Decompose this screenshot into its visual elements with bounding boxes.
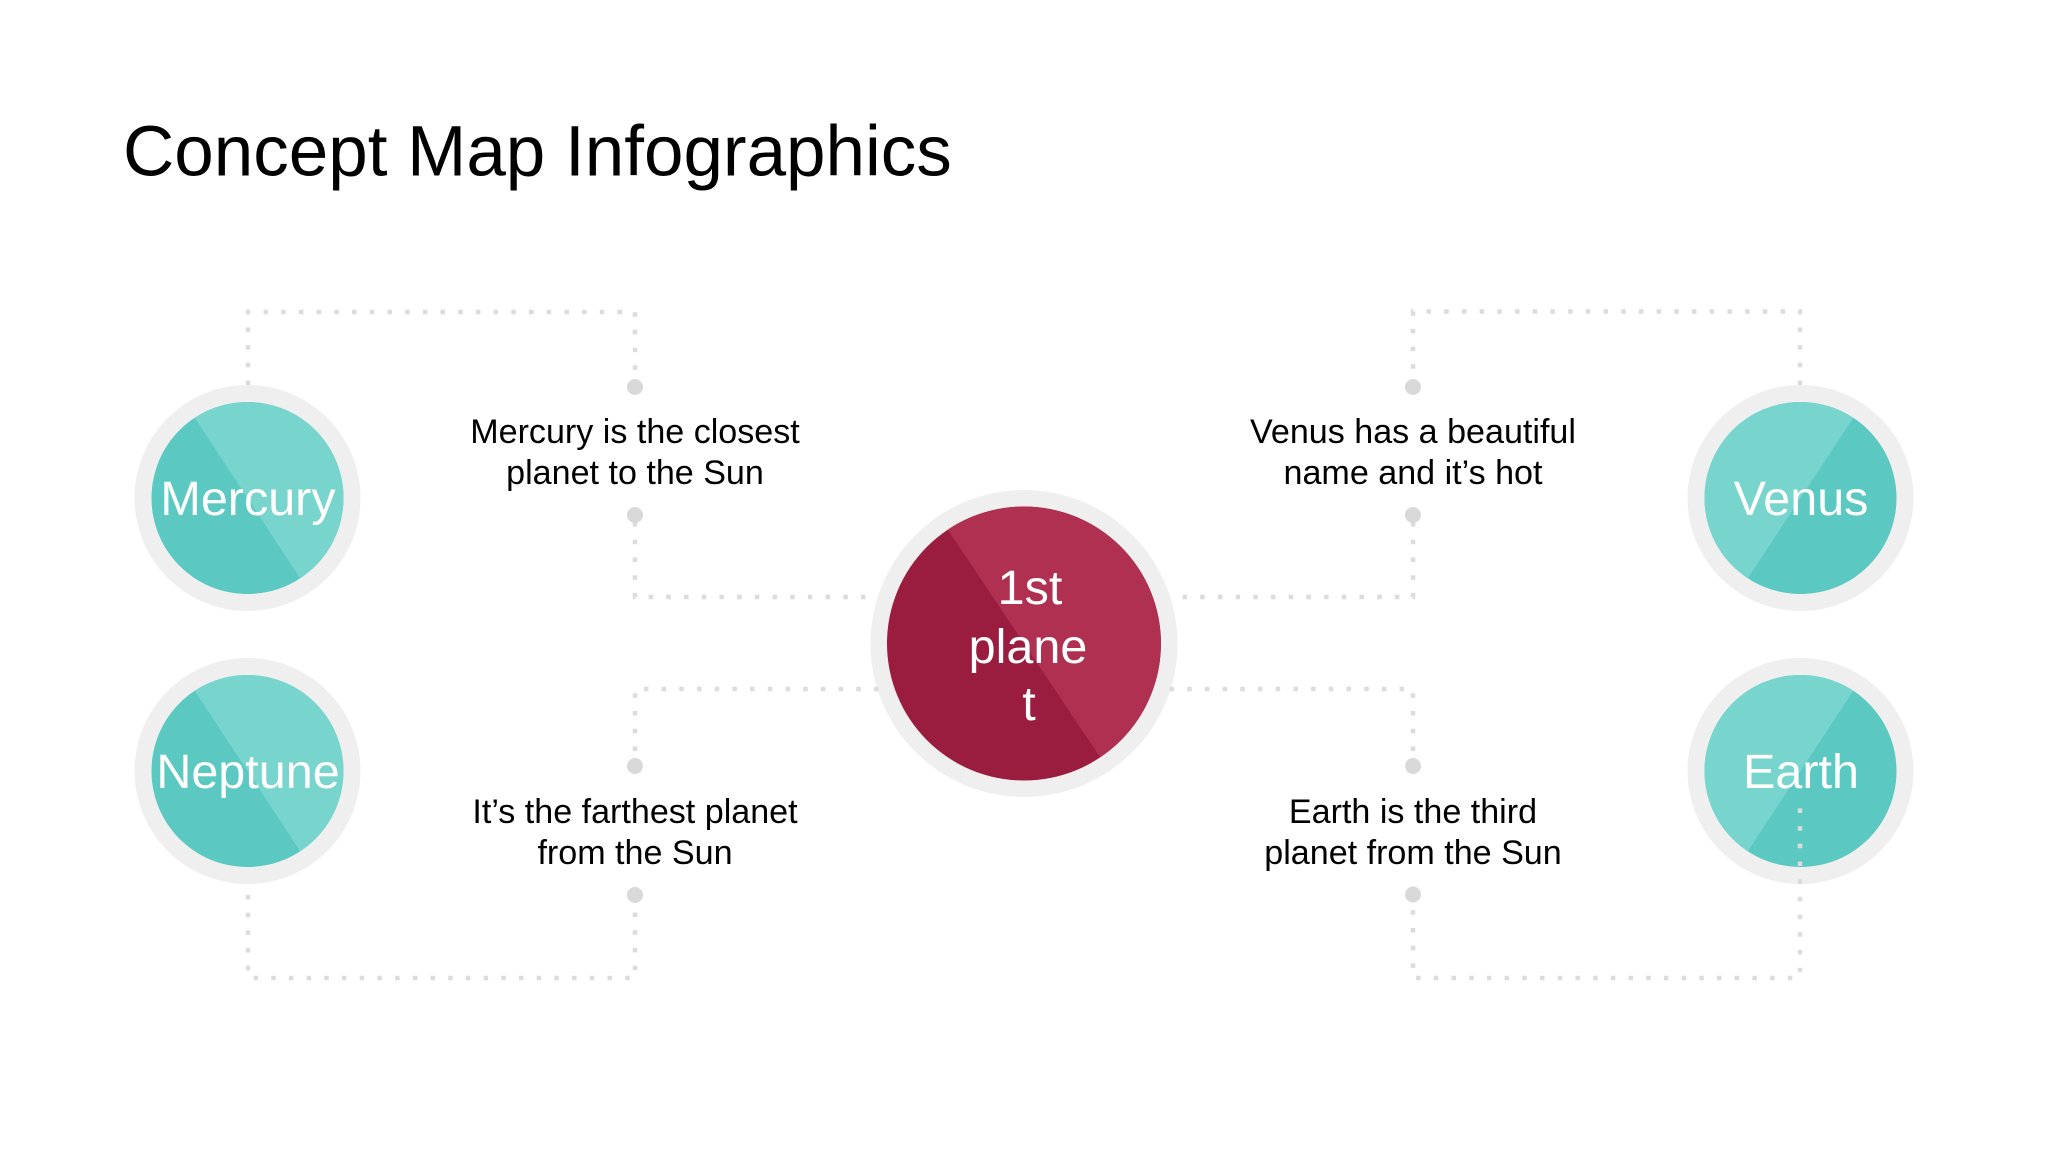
connector: Venus to description [1405,312,1800,395]
center planet: 1st [998,561,1063,615]
planet: Venus: Venus [1734,472,1868,526]
text: Mercury description: Mercury is the closest [470,413,800,451]
planet: Neptune [134,658,360,884]
connector: Mercury to description [248,312,643,395]
center planet: plane [969,620,1087,674]
planet: Earth [1688,658,1914,884]
text: Earth description: planet from the Sun [1264,834,1562,872]
title: Concept Map Infographics [123,112,952,192]
planet: Mercury [134,385,360,611]
planet: Earth: Earth [1743,745,1859,799]
text: Neptune description: from the Sun [537,834,733,872]
planet: Venus [1688,385,1914,611]
connector: description to center, lower right [1170,689,1421,774]
center planet: t [1022,677,1036,731]
connector: Neptune to description [248,887,643,978]
text: Earth description: Earth is the third [1289,793,1537,831]
text: Mercury description: planet to the Sun [506,454,764,492]
center planet [870,490,1178,797]
text: Neptune description: It’s the farthest planet [472,793,798,831]
text: Venus description: Venus has a beautiful [1250,413,1576,451]
connector: Earth to description [1405,808,1800,978]
text: Venus description: name and it’s hot [1284,454,1543,492]
planet: Neptune: Neptune [156,745,340,799]
connector: description to center, lower left [627,689,878,774]
connector: description to center, upper left [627,507,866,597]
planet: Mercury: Mercury [160,472,336,526]
connector: description to center, upper right [1182,507,1421,597]
